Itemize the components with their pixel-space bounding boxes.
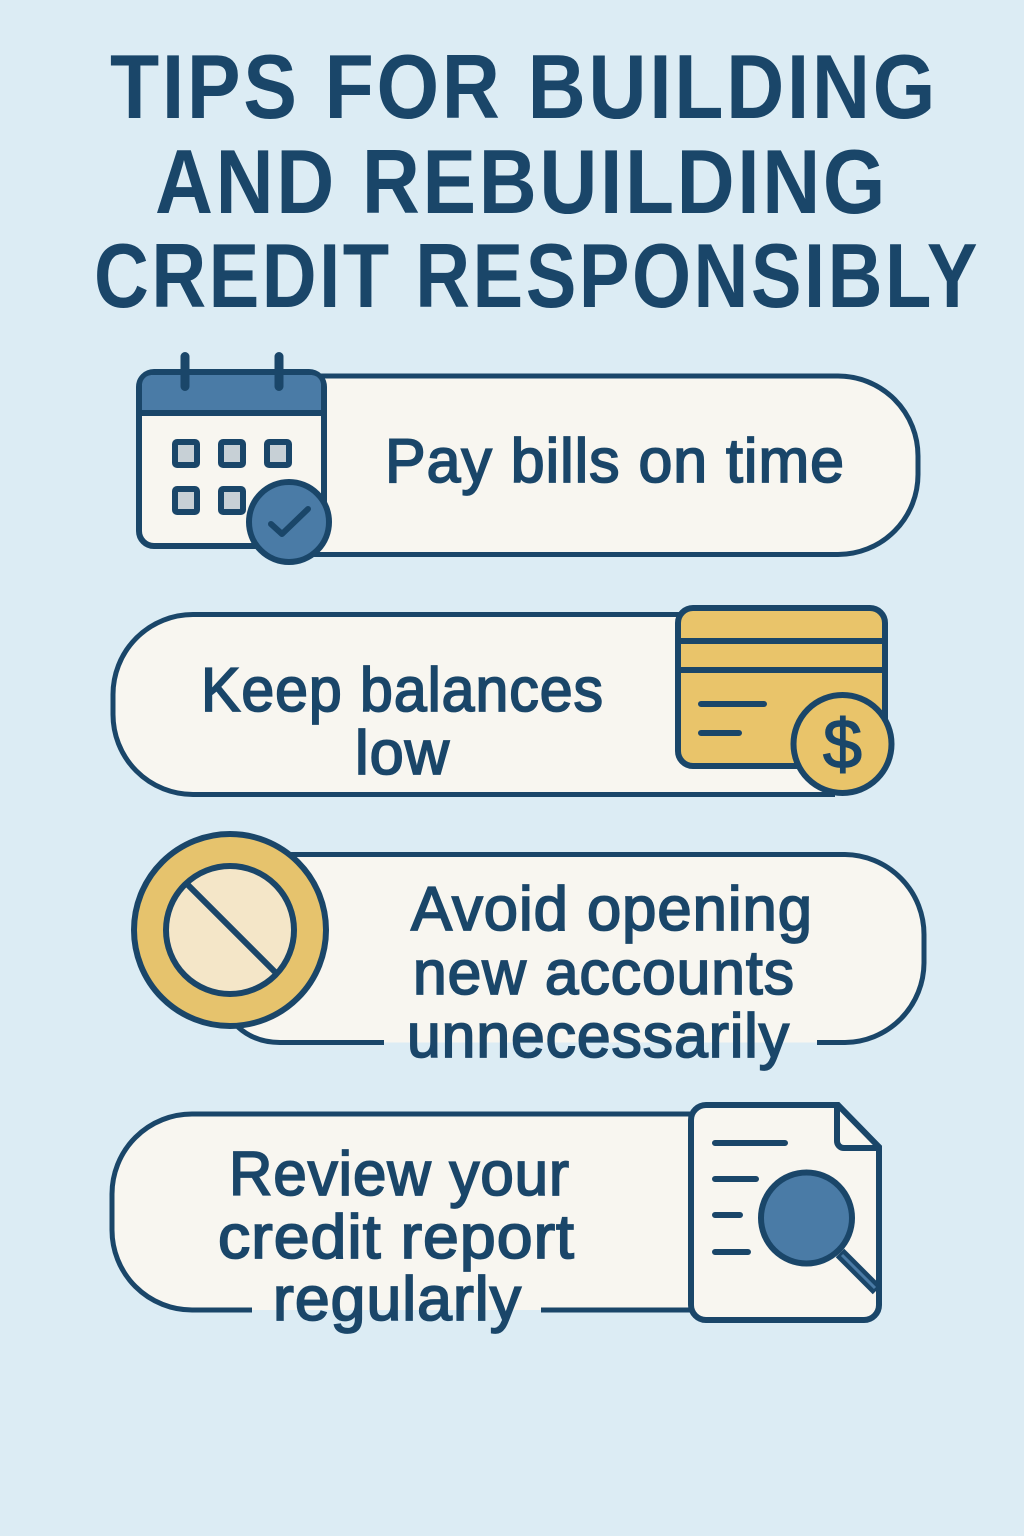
tip text: review your credit report regularly <box>218 1140 575 1334</box>
panel: review your credit report <box>112 1105 879 1334</box>
pill background <box>113 614 835 794</box>
title: TIPS FOR BUILDING <box>110 37 938 138</box>
tip text: review your credit report regularly: regularly <box>273 1265 522 1334</box>
title: AND REBUILDING <box>155 132 888 233</box>
icon: prohibition sign <box>134 834 326 1026</box>
title <box>94 37 980 327</box>
tip text: review your credit report regularly: credit report <box>218 1203 575 1272</box>
pill background <box>112 1114 700 1310</box>
tip text: keep balances low: low <box>355 719 450 788</box>
tip text: avoid opening new accounts unnecessarily <box>407 875 813 1071</box>
panel: pay bills on time <box>139 356 918 562</box>
pill background <box>300 376 918 554</box>
panel: keep balances low <box>113 608 892 794</box>
tip text: review your credit report regularly: Review your <box>229 1140 570 1209</box>
icon: credit card with dollar coin: $ <box>823 705 862 783</box>
tip text: avoid opening new accounts unnecessarily: new accounts <box>413 939 795 1008</box>
icon: document with magnifying glass <box>691 1105 879 1320</box>
tip text: pay bills on time: Pay bills on time <box>385 427 845 496</box>
tip text: keep balances low: Keep balances <box>201 656 604 725</box>
tip text: avoid opening new accounts unnecessarily: unnecessarily <box>407 1002 790 1071</box>
icon: calendar with check <box>139 356 329 562</box>
icon: credit card with dollar coin <box>678 608 892 793</box>
pill background <box>238 854 924 1042</box>
tip text: keep balances low <box>201 656 604 788</box>
panel: avoid opening new accounts <box>134 834 924 1071</box>
tip text: avoid opening new accounts unnecessarily: Avoid opening <box>411 875 813 944</box>
